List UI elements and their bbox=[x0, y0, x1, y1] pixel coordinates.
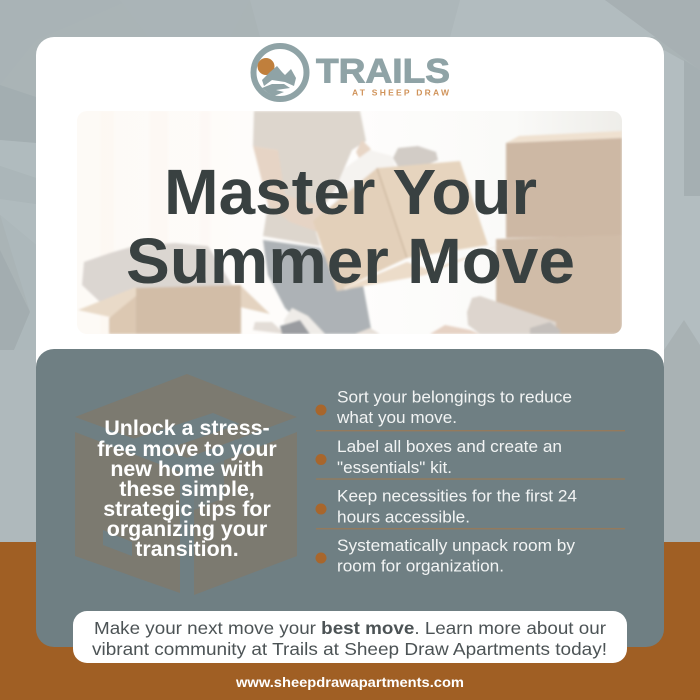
tip 4: Systematically unpack room by bbox=[337, 537, 576, 555]
tip 3: hours accessible. bbox=[337, 508, 470, 526]
icon: moving box watermark bbox=[75, 374, 297, 595]
callout: call to action: Make your next move your best move . Learn more about our bbox=[94, 618, 606, 638]
intro text: strategic tips for bbox=[103, 497, 271, 521]
carried clothes bbox=[336, 145, 438, 200]
tip 3: Keep necessities for the first 24 bbox=[337, 488, 577, 506]
arms bbox=[356, 142, 372, 158]
left clothes pile bbox=[82, 243, 232, 302]
logo: Trails at Sheep Draw bbox=[254, 46, 450, 99]
tip 2: "essentials" kit. bbox=[337, 459, 452, 477]
intro text: organizing your bbox=[107, 517, 267, 541]
logo tagline: AT SHEEP DRAW bbox=[352, 88, 450, 98]
title line 2: Summer Move bbox=[126, 225, 575, 297]
rolled blanket bbox=[467, 296, 556, 334]
tip 2: Label all boxes and create an bbox=[337, 438, 562, 456]
callout: call to action: vibrant community at Trails at Sheep Draw Apartments today! bbox=[92, 639, 607, 659]
tip 4 bbox=[316, 537, 576, 576]
white card bbox=[36, 37, 664, 437]
tip 1: what you move. bbox=[336, 409, 457, 427]
floor clothes bbox=[253, 322, 285, 334]
tip 2 bbox=[316, 438, 562, 477]
intro text: Unlock a stress- bbox=[104, 416, 270, 440]
tip 1 bbox=[316, 388, 572, 427]
title line 1: Master Your bbox=[164, 156, 537, 228]
carried box bbox=[313, 161, 500, 291]
open box front left bbox=[78, 285, 270, 334]
tip 4: room for organization. bbox=[337, 558, 504, 576]
intro text: free move to your bbox=[97, 437, 277, 461]
jeans bbox=[263, 240, 372, 334]
shirt bbox=[253, 111, 366, 246]
intro text: transition. bbox=[135, 537, 239, 561]
intro text bbox=[97, 416, 277, 561]
logo wordmark: TRAILS bbox=[316, 52, 450, 90]
panel: tips bbox=[36, 349, 664, 647]
intro text: new home with bbox=[110, 457, 264, 481]
website url: www.sheepdrawapartments.com bbox=[235, 675, 464, 690]
tip 3 bbox=[316, 488, 577, 526]
brown base band bbox=[0, 542, 700, 700]
tip 1: Sort your belongings to reduce bbox=[337, 388, 572, 406]
callout: call to action bbox=[73, 611, 627, 663]
logo emblem bbox=[254, 46, 306, 99]
right stacked boxes bbox=[496, 131, 622, 334]
intro text: these simple, bbox=[119, 477, 255, 501]
title bbox=[126, 156, 575, 297]
photo: person packing moving boxes bbox=[77, 111, 622, 334]
